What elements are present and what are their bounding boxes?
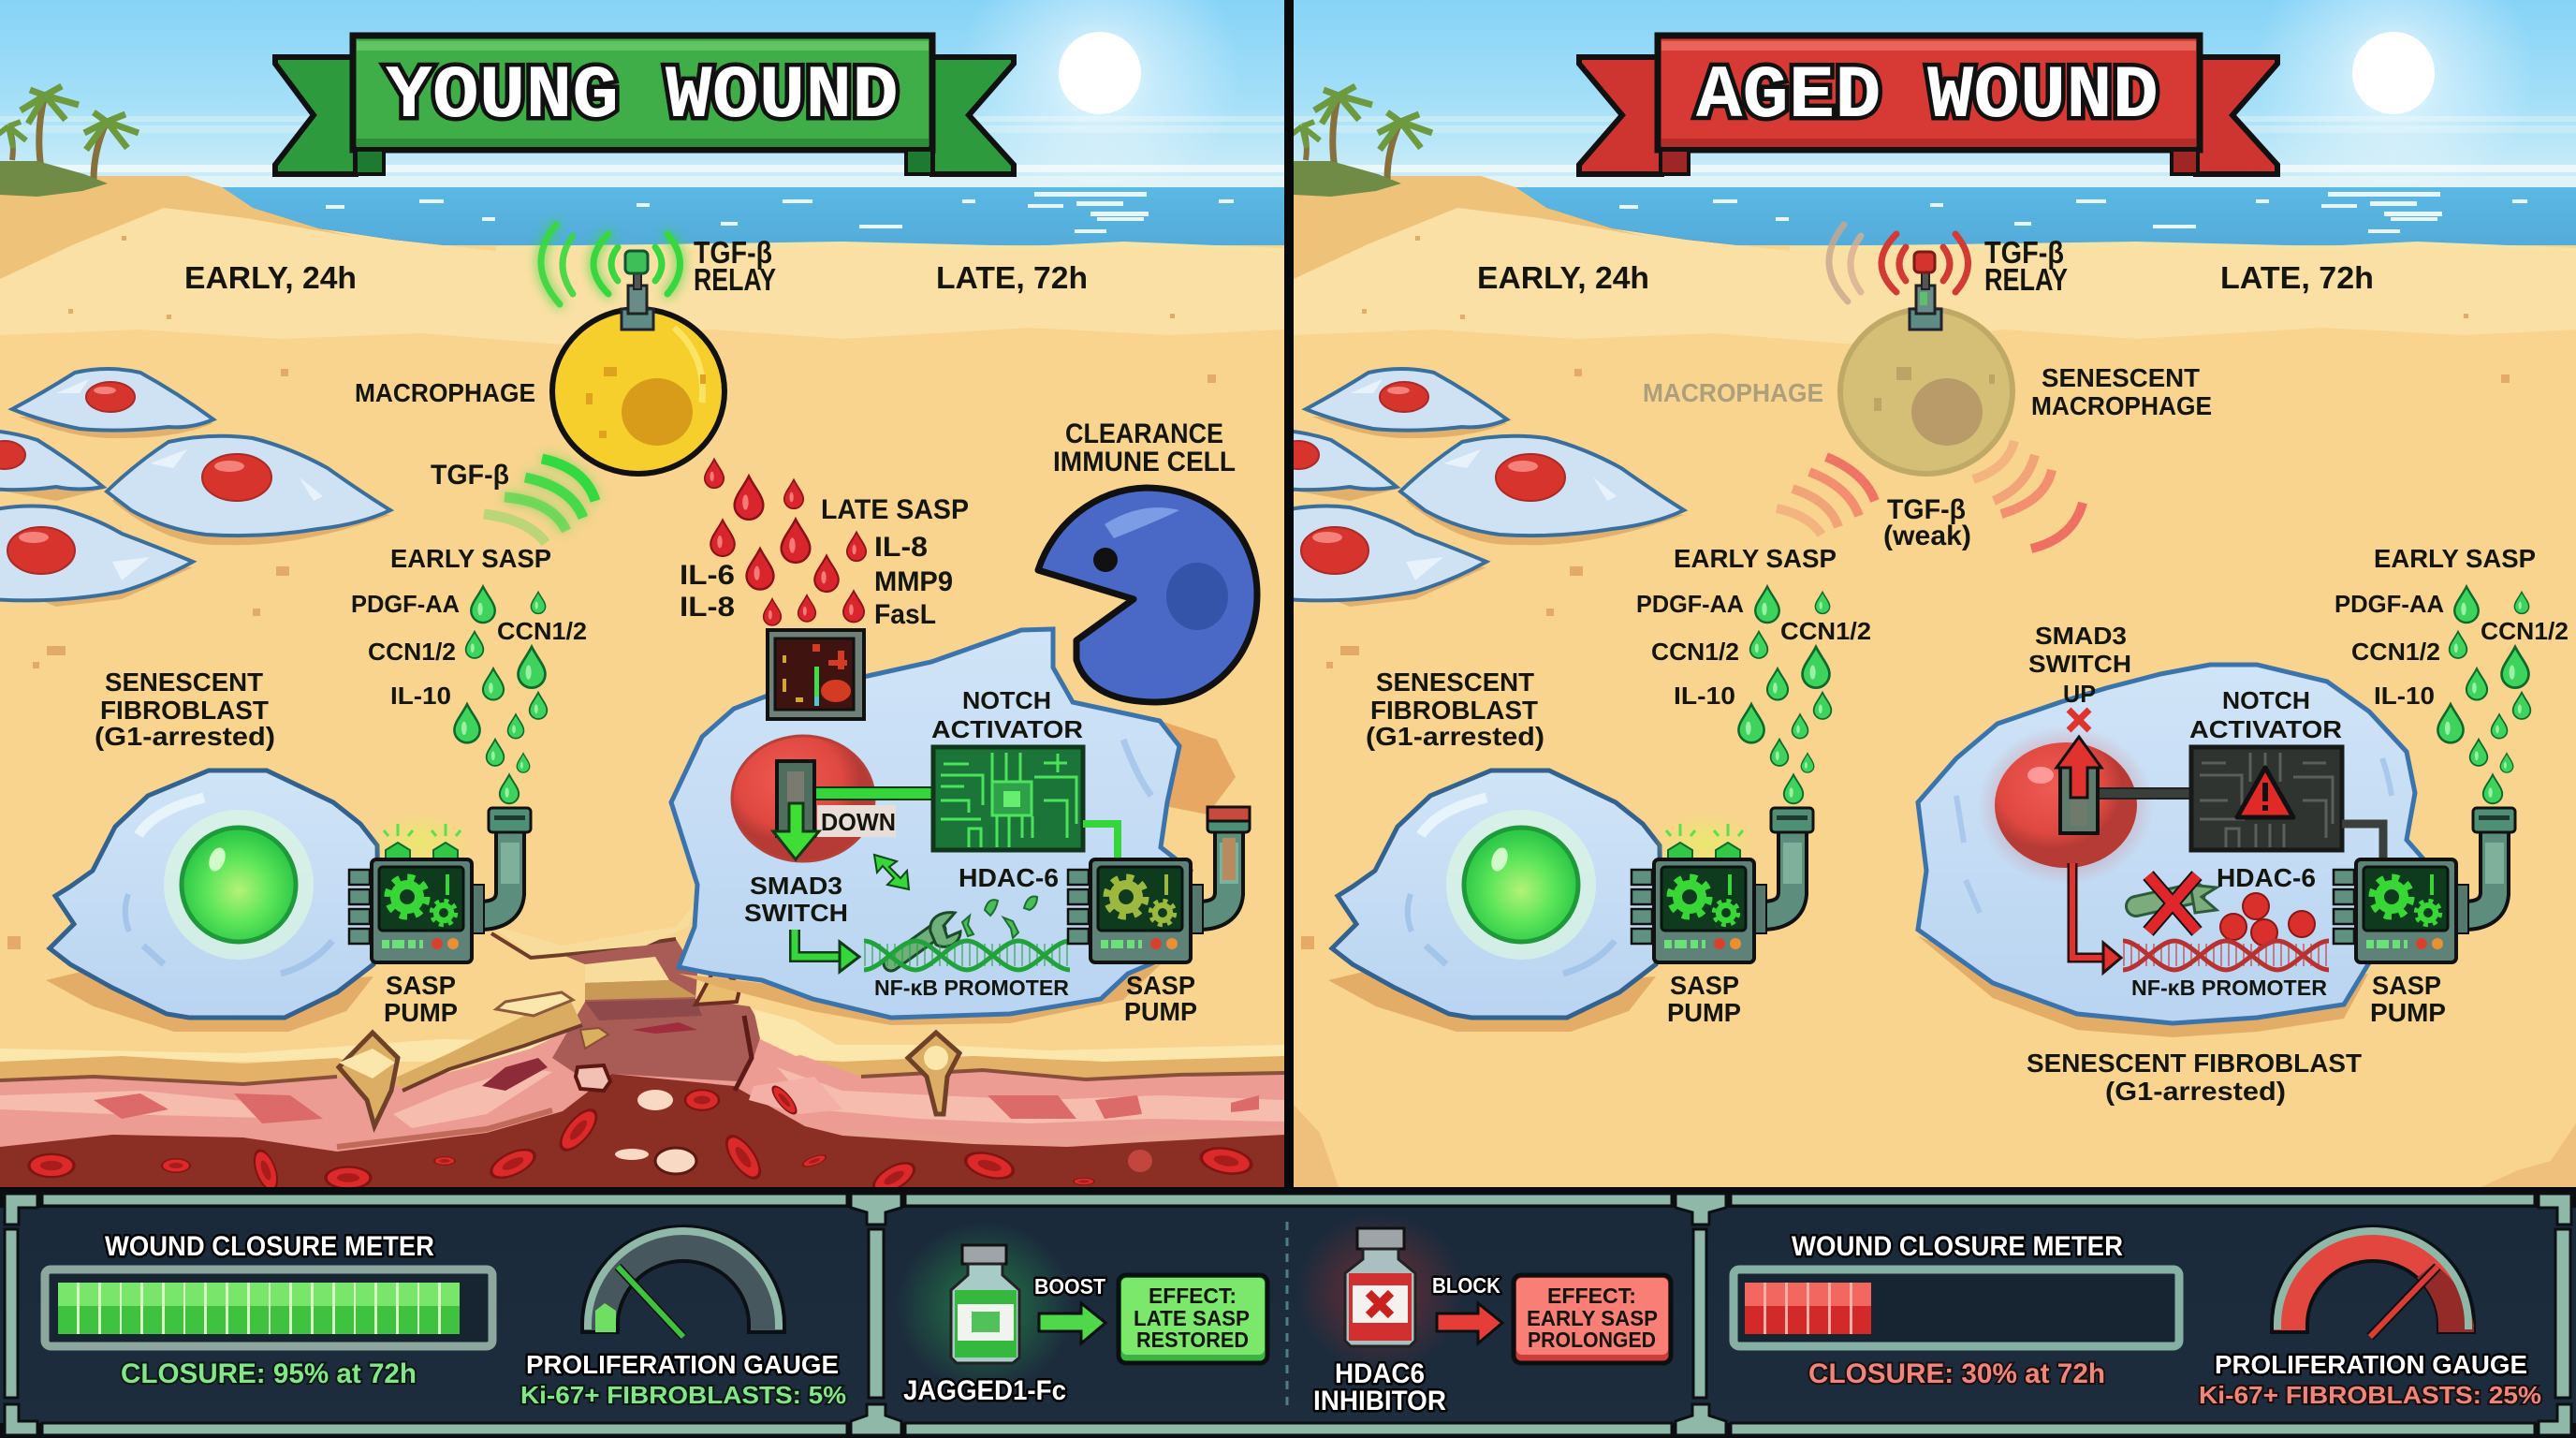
cell with stuck switch, disabled Notch activator and NF-kB promoter [1918, 622, 2434, 1037]
panel: young wound [0, 0, 1284, 1198]
wire: Notch activator to pump [2342, 824, 2383, 858]
dashed divider [1286, 1222, 1288, 1407]
early SASP factor labels: PDGF-AA [351, 590, 460, 618]
clearance immune cell [1038, 488, 1257, 702]
label: SMAD3 switch: SMAD3 [750, 872, 842, 900]
wire: switch to Notch activator [2098, 788, 2194, 799]
beach scene with sky, sea, sun, palms and small fibroblasts [1278, 0, 2576, 1191]
label: boost: BOOST [1034, 1274, 1105, 1299]
time label early: EARLY, 24h [184, 260, 357, 295]
label: early SASP: EARLY SASP [1674, 544, 1837, 573]
label: senescent fibroblast [95, 668, 275, 751]
effect box [1514, 1275, 1671, 1363]
SMAD3 to promoter arrow [795, 930, 859, 972]
early SASP factor labels: CCN1/2 [2351, 638, 2440, 666]
time label early: EARLY, 24h [1477, 260, 1649, 295]
label: senescent fibroblast: (G1-arrested) [2105, 1077, 2286, 1106]
clearance immune cell label: CLEARANCE [1065, 418, 1223, 449]
title: AGED WOUND [1696, 54, 2159, 139]
label: senescent fibroblast [2027, 1049, 2362, 1106]
label: Notch activator: NOTCH [962, 686, 1051, 714]
label: TGF-beta relay: TGF-β [694, 235, 772, 270]
early SASP factor labels: CCN1/2 [1651, 638, 1739, 666]
late SASP labels: IL-8 [680, 592, 735, 623]
label: SASP pump: PUMP [384, 998, 458, 1027]
SMAD3 switch down arrow [773, 761, 819, 859]
label: early SASP: EARLY SASP [390, 544, 551, 573]
wound closure meter, aged [1734, 1231, 2179, 1389]
early SASP factor labels: IL-10 [390, 682, 451, 710]
label: Notch activator: ACTIVATOR [2189, 715, 2342, 743]
effect box [1119, 1275, 1267, 1363]
SASP pump [1632, 808, 1813, 962]
label: weak TGF-beta: (weak) [1883, 521, 1971, 551]
effect box: PROLONGED [1528, 1328, 1656, 1352]
label: SMAD3 switch [744, 872, 848, 927]
icon: double arrow [874, 855, 909, 889]
effect box: EFFECT: [1149, 1284, 1237, 1308]
label: SASP pump: PUMP [2370, 998, 2446, 1027]
icon: NF-kB DNA helix [2123, 941, 2329, 970]
spike of scab, left [339, 1033, 398, 1126]
label: Notch activator [2189, 686, 2342, 743]
monitor [768, 630, 864, 719]
label: SASP pump: SASP [1126, 971, 1195, 1000]
label: SMAD3 switch up [2028, 622, 2131, 708]
label: TGF-beta relay: RELAY [1984, 262, 2068, 297]
label: HDAC-6: HDAC-6 [2217, 863, 2316, 892]
label: Notch activator [931, 686, 1083, 743]
icon: weak relay signal arcs [1829, 225, 1968, 301]
label: SMAD3 switch up: SMAD3 [2035, 622, 2127, 650]
label: SASP pump: SASP [1670, 971, 1739, 1000]
wire: Notch activator to pump [1083, 824, 1118, 858]
early SASP droplets [454, 586, 547, 803]
label: senescent fibroblast: (G1-arrested) [1366, 722, 1544, 751]
meter heading: WOUND CLOSURE METER [105, 1231, 434, 1262]
nucleus [732, 736, 874, 861]
banner: young wound [275, 36, 1014, 174]
label: NF-kB promoter: NF-κB PROMOTER [874, 976, 1069, 1000]
time label late: LATE, 72h [2220, 260, 2374, 295]
early SASP factor labels: CCN1/2 [2481, 617, 2569, 645]
label: SASP pump: SASP [2372, 971, 2441, 1000]
late SASP labels: IL-8 [874, 532, 928, 563]
icon: disabled Notch activator chip [2191, 747, 2342, 850]
intervention: HDAC6 inhibitor [1295, 1212, 1671, 1416]
label: SASP pump [2370, 971, 2446, 1027]
beach scene with sky, sea, sun, palms and small fibroblasts [0, 0, 1284, 1191]
icon: NF-kB DNA helix [864, 941, 1070, 970]
label: senescent fibroblast: (G1-arrested) [95, 722, 275, 751]
senescent fibroblast cell [1328, 770, 1661, 1032]
late SASP droplets [705, 459, 866, 625]
effect box: RESTORED [1136, 1328, 1249, 1352]
label: senescent macrophage: SENESCENT [2042, 363, 2200, 392]
label: SASP pump [384, 971, 458, 1027]
early SASP factor labels: IL-10 [2374, 682, 2435, 710]
label: SMAD3 switch up: SWITCH [2028, 650, 2131, 678]
label: DOWN: DOWN [821, 808, 896, 836]
senescent macrophage [1840, 252, 2012, 474]
label: early SASP: EARLY SASP [2374, 544, 2536, 573]
senescent fibroblast cell [46, 770, 378, 1032]
late SASP labels: IL-6 [680, 560, 735, 591]
icon: TGF-beta relay signal arcs [541, 225, 680, 304]
icon: red bottle [1345, 1228, 1415, 1346]
label: senescent fibroblast [1366, 668, 1544, 751]
icon: wrench [891, 913, 960, 963]
cell with switch, Notch activator and NF-kB promoter [671, 629, 1236, 1025]
meter bar [1734, 1269, 2179, 1346]
spike of scab, right [908, 1033, 959, 1114]
label: Jagged1-Fc: JAGGED1-Fc [903, 1375, 1066, 1406]
SMAD3 switch up arrow [2056, 737, 2101, 833]
icon: Notch activator chip [933, 747, 1083, 850]
early SASP factor labels: CCN1/2 [368, 638, 456, 666]
gauge heading: PROLIFERATION GAUGE [526, 1350, 839, 1379]
panel: aged wound [1278, 0, 2576, 1191]
gauge heading: PROLIFERATION GAUGE [2215, 1350, 2527, 1379]
nucleus to promoter red arrow [2072, 863, 2121, 973]
late SASP labels [680, 494, 969, 630]
late SASP labels: FasL [874, 599, 936, 630]
label: TGF-beta: TGF-β [431, 460, 509, 491]
label: Notch activator: ACTIVATOR [931, 715, 1083, 743]
metal frame [5, 1194, 2571, 1435]
effect box: EFFECT: [1547, 1284, 1636, 1308]
label: senescent fibroblast: SENESCENT [1376, 668, 1534, 697]
label: macrophage: MACROPHAGE [355, 378, 535, 407]
label: TGF-beta relay: RELAY [694, 262, 776, 297]
label: SASP pump: PUMP [1124, 997, 1197, 1026]
intervention: Jagged1-Fc [896, 1222, 1267, 1406]
early SASP factor labels: CCN1/2 [1780, 617, 1871, 645]
label: senescent macrophage: MACROPHAGE [2031, 391, 2212, 420]
gauge value: Ki-67+ FIBROBLASTS: 25% [2199, 1381, 2541, 1409]
clearance immune cell label: IMMUNE CELL [1053, 447, 1236, 477]
skin wound cross-section [0, 901, 1284, 1198]
label: HDAC-6: HDAC-6 [959, 863, 1059, 892]
label: HDAC6 inhibitor: INHIBITOR [1313, 1386, 1446, 1416]
label: SASP pump: SASP [386, 971, 456, 1000]
label: senescent macrophage [2031, 363, 2212, 420]
effect box: LATE SASP [1134, 1306, 1250, 1330]
label: senescent fibroblast: FIBROBLAST [100, 696, 269, 725]
early SASP factor labels: CCN1/2 [497, 617, 587, 645]
icon: blocked wrench [2136, 875, 2217, 932]
dashboard panel [0, 1189, 2576, 1438]
wound closure meter, young [45, 1231, 492, 1389]
label: SASP pump [1124, 971, 1197, 1026]
effect box: EARLY SASP [1527, 1306, 1658, 1330]
early SASP droplets [1738, 586, 1831, 803]
icon: green TGF-beta signal waves [484, 459, 595, 543]
label: SASP pump [1667, 971, 1741, 1027]
label: HDAC6 inhibitor: HDAC6 [1335, 1358, 1425, 1389]
label: NF-kB promoter: NF-κB PROMOTER [2131, 976, 2327, 1000]
title: YOUNG WOUND [386, 54, 899, 139]
time label late: LATE, 72h [936, 260, 1088, 295]
label: macrophage, faded: MACROPHAGE [1643, 378, 1823, 407]
late SASP labels: LATE SASP [821, 494, 969, 525]
clearance immune cell label [1053, 418, 1236, 477]
SASP pump, late state [1068, 807, 1250, 962]
label: Notch activator: NOTCH [2222, 686, 2310, 714]
label: SMAD3 switch: SWITCH [744, 899, 848, 927]
label: TGF-beta relay [1984, 235, 2068, 297]
label: senescent fibroblast: FIBROBLAST [1370, 696, 1538, 725]
closure value: CLOSURE: 30% at 72h [1808, 1358, 2105, 1389]
early SASP factor labels [2334, 590, 2569, 710]
gauge value: Ki-67+ FIBROBLASTS: 5% [520, 1381, 846, 1409]
arrow: boost [1039, 1303, 1105, 1343]
banner: aged wound [1579, 36, 2277, 174]
proliferation gauge, young [520, 1226, 846, 1409]
icon: weak red TGF-beta waves [1777, 441, 2083, 549]
label: TGF-beta relay [694, 235, 776, 297]
label: TGF-beta relay: TGF-β [1984, 235, 2064, 270]
label: block: BLOCK [1432, 1273, 1500, 1298]
label: senescent fibroblast: SENESCENT [105, 668, 263, 697]
label: SMAD3 switch up: UP [2063, 680, 2096, 708]
SASP pump [349, 808, 531, 962]
arrow: block [1437, 1303, 1502, 1343]
nucleus with red glow [1978, 726, 2154, 885]
label: weak TGF-beta: TGF-β [1887, 494, 1966, 525]
meter bar [45, 1269, 492, 1346]
early SASP droplets [2437, 586, 2530, 803]
macrophage [552, 251, 724, 474]
closure value: CLOSURE: 95% at 72h [121, 1358, 417, 1389]
label: senescent fibroblast: SENESCENT FIBROBLAST [2027, 1049, 2362, 1078]
early SASP factor labels [351, 590, 587, 710]
label: weak TGF-beta [1883, 494, 1971, 551]
meter heading: WOUND CLOSURE METER [1792, 1231, 2123, 1262]
early SASP factor labels: IL-10 [1674, 682, 1735, 710]
early SASP factor labels: PDGF-AA [1636, 590, 1744, 618]
label: HDAC6 inhibitor [1313, 1358, 1446, 1416]
icon: released fragments [962, 897, 1037, 938]
proliferation gauge, aged [2199, 1226, 2541, 1409]
sand corner shading [1294, 1105, 2576, 1187]
icon: red repressor proteins [2220, 893, 2315, 946]
wire: switch to Notch activator [814, 787, 934, 800]
label: SASP pump: PUMP [1667, 998, 1741, 1027]
icon: green bottle [951, 1245, 1019, 1363]
early SASP factor labels: PDGF-AA [2334, 590, 2444, 618]
SASP pump [2334, 808, 2515, 962]
icon: small red X [2069, 710, 2089, 730]
early SASP factor labels [1636, 590, 1871, 710]
late SASP labels: MMP9 [874, 566, 953, 597]
